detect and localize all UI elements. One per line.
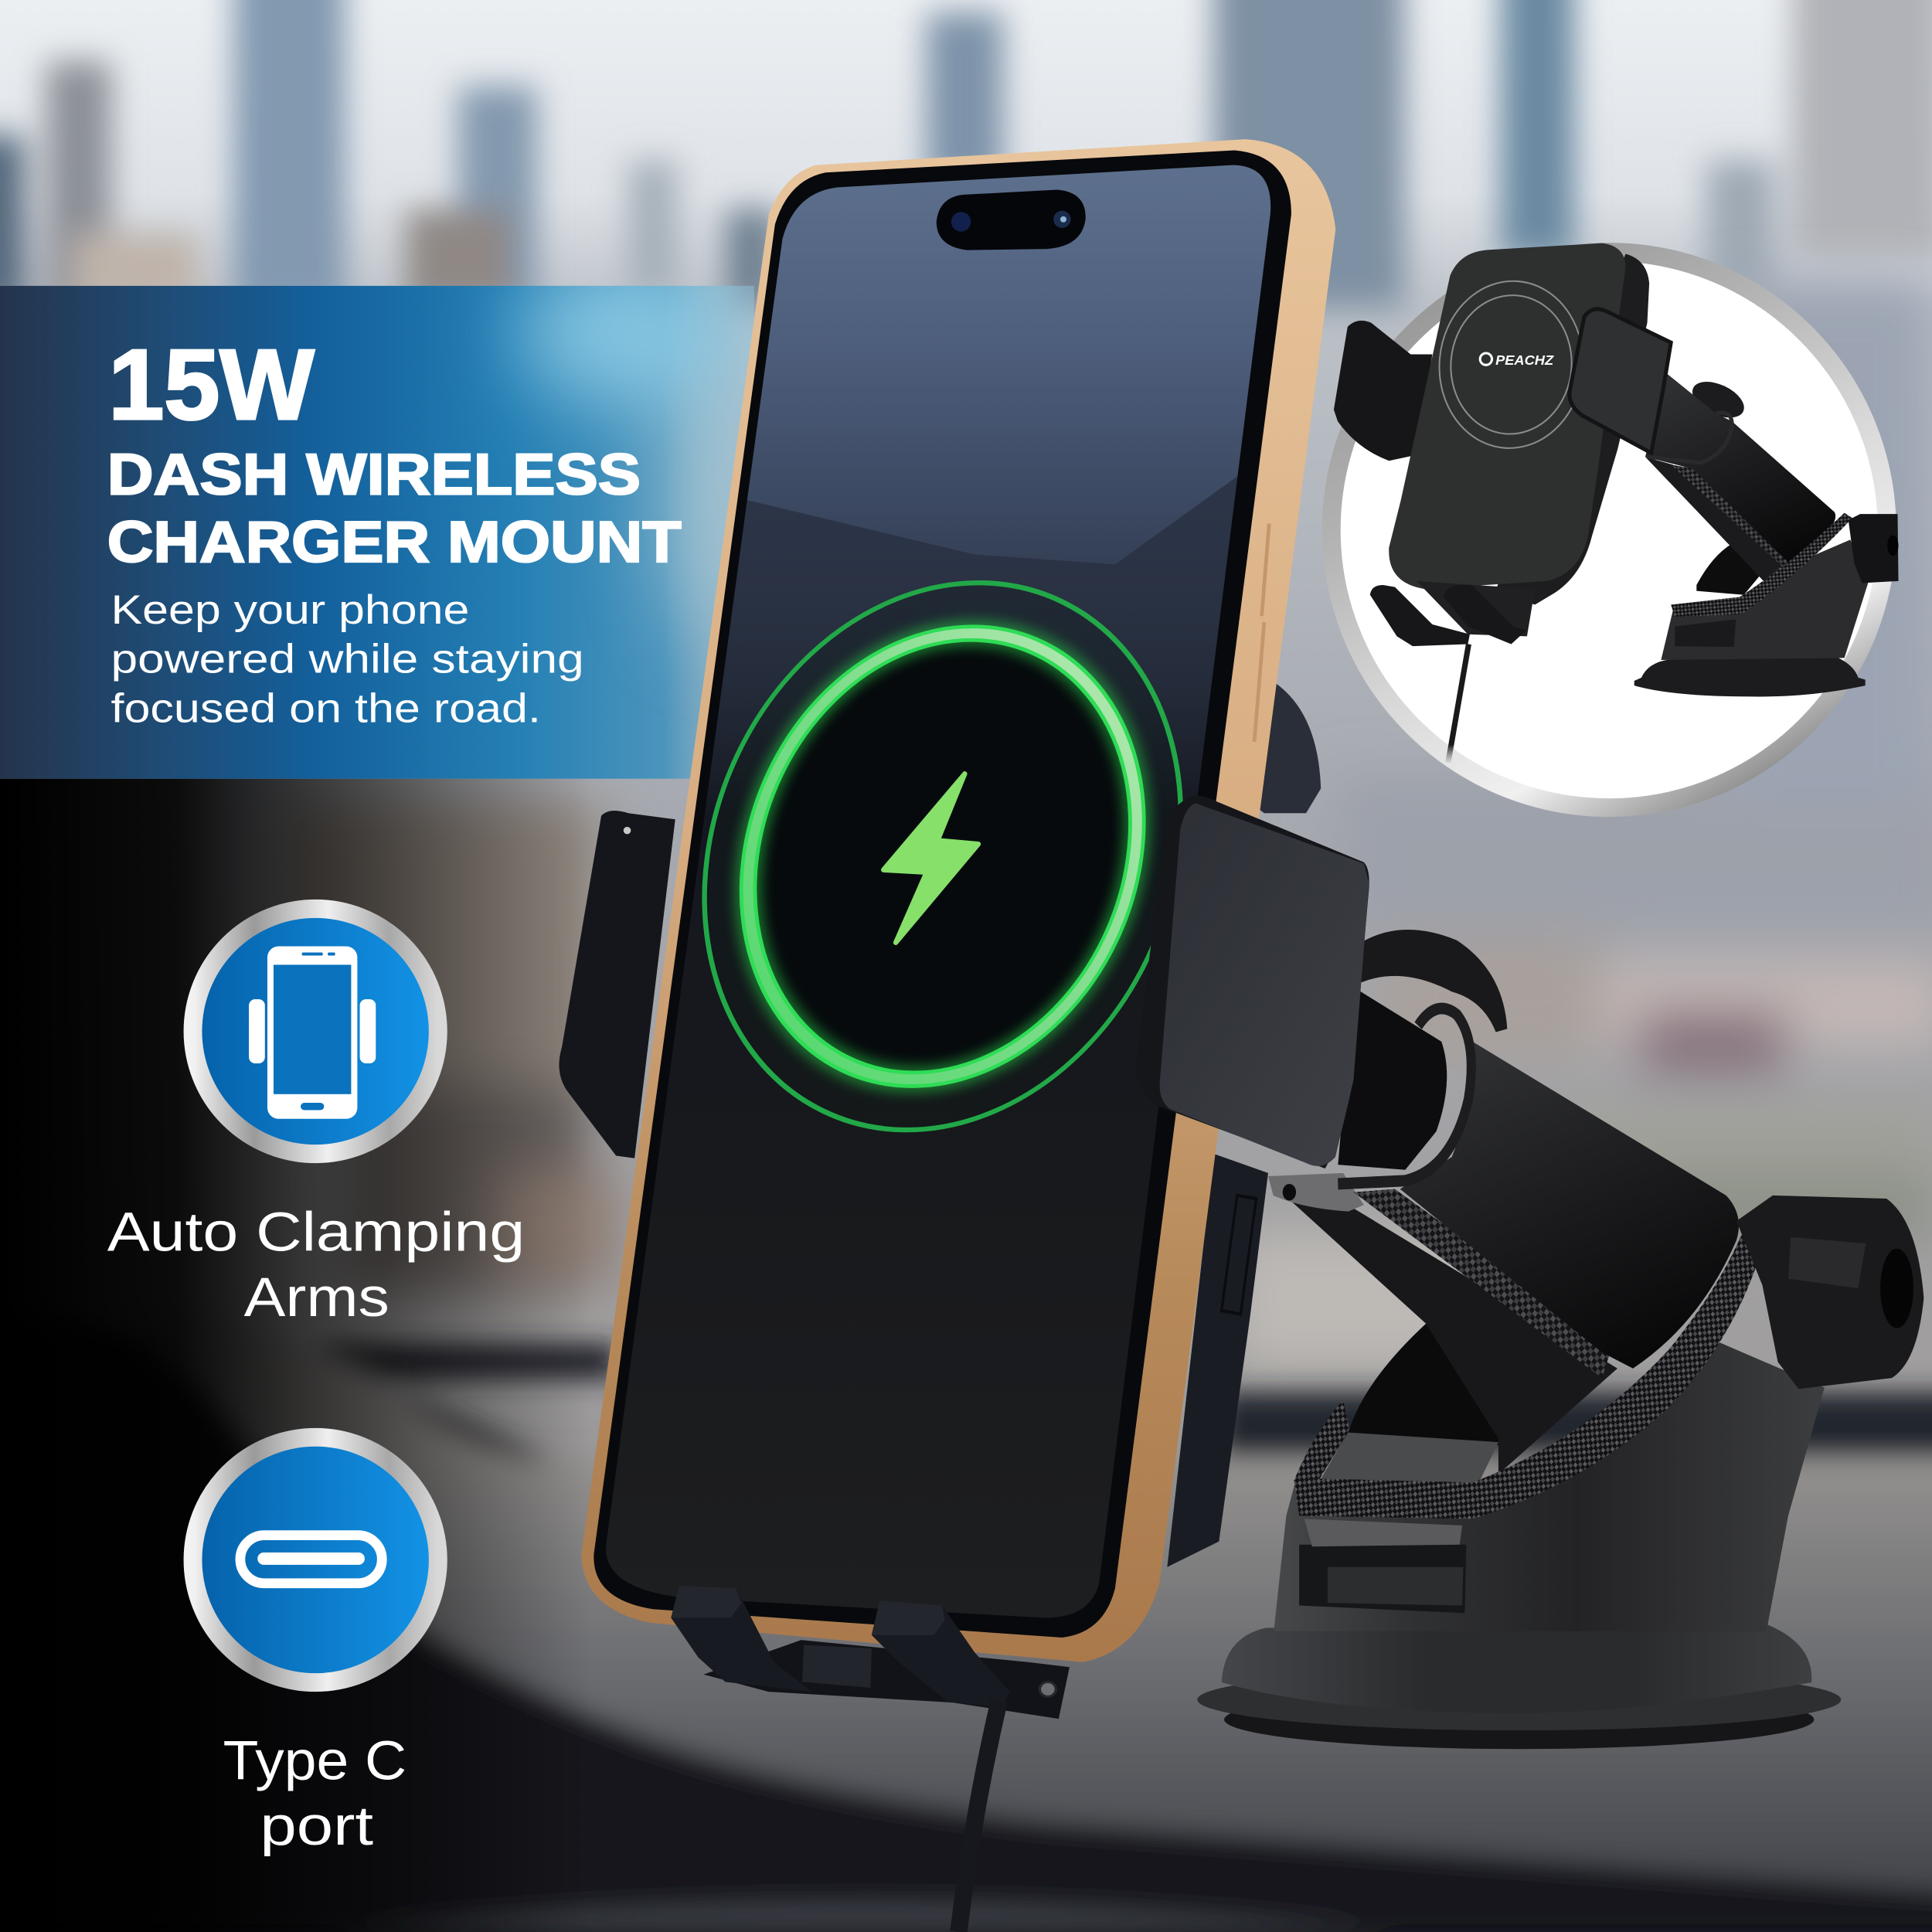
cable — [1448, 645, 1468, 763]
charger side housing — [1167, 1154, 1268, 1567]
base body — [1274, 1336, 1825, 1631]
carbon strap — [1294, 1221, 1762, 1519]
icon: charging bolt — [883, 774, 978, 943]
bottom hooks — [671, 1586, 1070, 1719]
left clamp — [1334, 321, 1432, 461]
description text: powered while staying — [111, 637, 584, 682]
heading: 15W: 15W — [108, 329, 315, 440]
rear housing — [1495, 253, 1649, 605]
panel: blue title banner — [0, 259, 770, 779]
phone — [582, 139, 1335, 1662]
heading: product name — [107, 441, 682, 574]
icon: USB type C port — [193, 1437, 438, 1682]
screen reflection — [728, 476, 1238, 645]
dash surface — [99, 1294, 1932, 1895]
inset: product photo in white circle — [1332, 243, 1899, 808]
side knob — [1849, 514, 1899, 583]
hooks — [1370, 581, 1535, 646]
charging rings — [671, 582, 1214, 1131]
lower arm — [1645, 457, 1791, 581]
strap — [1671, 513, 1852, 617]
label: Type C port — [223, 1730, 406, 1857]
right clamp — [1570, 309, 1671, 453]
left dark fade — [0, 779, 591, 1932]
base window — [1299, 1519, 1466, 1613]
upper tube — [1400, 1042, 1739, 1369]
lower arm — [1268, 1173, 1617, 1475]
description text: Keep your phone — [111, 587, 469, 633]
collar — [1338, 1009, 1471, 1184]
heading: product name: DASH WIRELESS — [107, 441, 641, 506]
logo: PEACHZ — [1495, 352, 1555, 368]
label: Auto Clamping Arms: Arms — [244, 1267, 389, 1328]
side buttons — [1254, 524, 1269, 742]
base — [1661, 539, 1868, 660]
camera notch — [937, 190, 1086, 250]
disc — [1634, 658, 1866, 696]
description text: focused on the road. — [111, 685, 541, 731]
description text — [111, 587, 584, 731]
gold frame — [582, 139, 1335, 1662]
port glyph — [240, 1536, 382, 1583]
label: Auto Clamping Arms: Auto Clamping — [107, 1201, 525, 1263]
heading: product name: CHARGER MOUNT — [107, 509, 682, 574]
product illustration — [1334, 243, 1899, 763]
adjustment knob — [1356, 930, 1507, 1032]
lower console — [332, 1903, 1393, 1932]
mount: rear arm and suction base — [1167, 930, 1923, 1749]
side knob — [1736, 1196, 1923, 1389]
label: Auto Clamping Arms — [107, 1201, 525, 1328]
charging cable — [958, 1700, 999, 1932]
label: Type C port: port — [260, 1795, 373, 1857]
charger back housing — [1232, 684, 1321, 813]
left clamp — [559, 811, 675, 1158]
upper tube — [1645, 372, 1835, 566]
suction lip — [1197, 1669, 1841, 1749]
base cavity — [1349, 1324, 1514, 1445]
black bezel — [594, 151, 1291, 1638]
plate — [1389, 243, 1625, 589]
label: Type C port: Type C — [223, 1730, 406, 1791]
inner tube — [1338, 987, 1447, 1170]
suction dome — [1222, 1624, 1811, 1713]
icon: auto clamping arms — [193, 909, 438, 1154]
dark horizon band — [321, 1343, 616, 1380]
knob — [1687, 375, 1750, 425]
screen — [606, 165, 1270, 1617]
lower dark interior — [0, 1306, 1932, 1932]
phone glyph — [249, 946, 376, 1119]
right clamp — [1136, 796, 1369, 1168]
